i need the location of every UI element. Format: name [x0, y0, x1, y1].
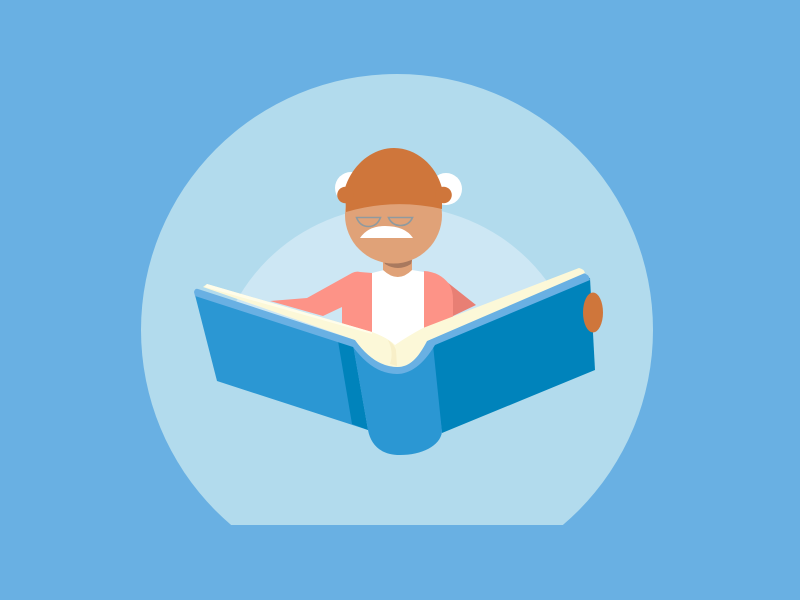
jacket dark sleeve — [447, 282, 476, 316]
mustache — [360, 226, 413, 238]
right pages — [395, 268, 585, 367]
cover edge — [194, 273, 590, 374]
large background circle — [141, 74, 653, 525]
page top highlight — [205, 284, 372, 334]
illustration: man reading a book — [141, 74, 653, 525]
hat — [337, 148, 452, 212]
inner light circle — [236, 211, 546, 339]
left cover inner strip — [338, 341, 368, 430]
right cover — [431, 278, 595, 433]
page fold shading — [388, 340, 397, 366]
left pages — [203, 284, 398, 367]
head — [345, 166, 442, 264]
glasses — [356, 218, 412, 226]
jacket left arm — [270, 272, 372, 335]
jacket right side — [424, 271, 453, 332]
hair tufts — [335, 172, 462, 205]
left cover — [195, 295, 368, 430]
neck — [383, 258, 412, 277]
spine — [353, 345, 442, 455]
figure: man — [270, 148, 476, 350]
book — [194, 268, 595, 455]
neck shadow — [383, 260, 412, 268]
white shirt — [372, 270, 424, 350]
hand holding book — [583, 292, 603, 332]
